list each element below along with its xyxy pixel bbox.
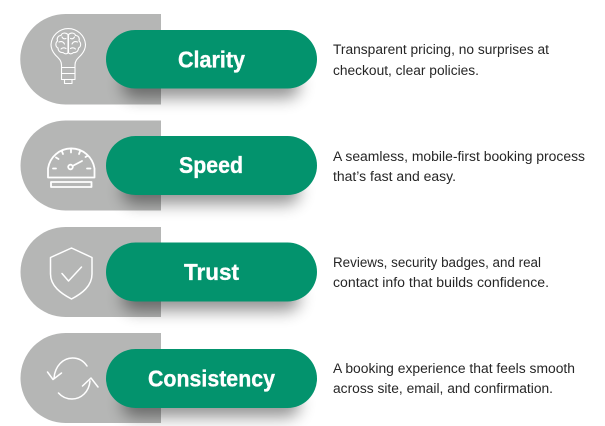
drop shadow: trust (122, 285, 300, 311)
gray tab: consistency (20, 333, 161, 423)
description: trust: Reviews, security badges, and real (333, 255, 541, 270)
description: clarity: checkout, clear policies. (333, 63, 479, 78)
gray tab: clarity (20, 14, 161, 104)
pill: clarity (106, 30, 317, 88)
drop shadow: clarity (122, 72, 300, 98)
panel: clarity (20, 14, 549, 104)
panel: trust (20, 227, 549, 317)
icon: shield with check (50, 248, 92, 299)
pill: trust (106, 242, 317, 302)
heading: trust: Trust (184, 259, 239, 285)
pill: speed (106, 136, 317, 195)
heading: consistency: Consistency (148, 366, 275, 392)
description: consistency: A booking experience that feels smooth (333, 361, 575, 376)
icon: sync arrows (48, 358, 98, 399)
description: trust (333, 255, 549, 290)
description: speed (333, 149, 585, 184)
gray tab: speed (20, 120, 161, 210)
pill: consistency (106, 349, 317, 408)
drop shadow: speed (122, 178, 300, 204)
description: consistency (333, 361, 575, 396)
description: clarity (333, 42, 549, 78)
heading: speed: Speed (179, 152, 243, 178)
gray tab: trust (20, 227, 161, 317)
icon: brain light bulb (51, 29, 86, 84)
drop shadow: consistency (122, 391, 300, 417)
description: speed: A seamless, mobile-first booking process (333, 149, 585, 164)
panel: speed (20, 120, 585, 210)
icon: speedometer (48, 148, 94, 187)
description: speed: that’s fast and easy. (333, 169, 456, 184)
heading: clarity: Clarity (178, 46, 245, 72)
description: clarity: Transparent pricing, no surprises at (333, 42, 549, 57)
panel: consistency (20, 333, 575, 423)
description: consistency: across site, email, and confirmation. (333, 381, 553, 396)
description: trust: contact info that builds confidence. (333, 275, 549, 290)
